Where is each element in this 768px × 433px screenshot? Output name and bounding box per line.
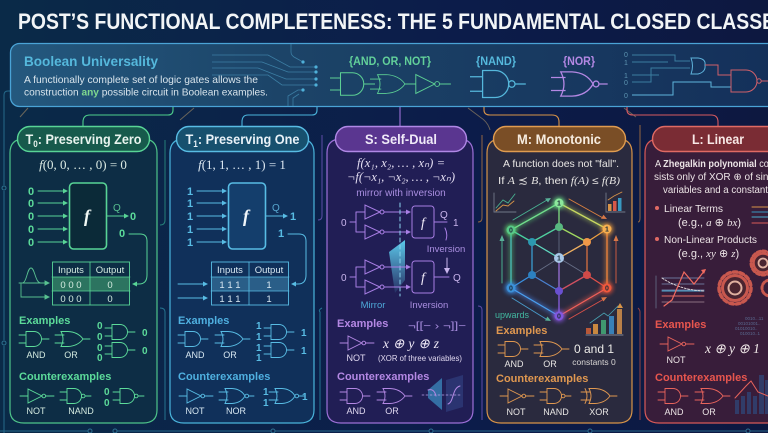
examples S: ¬[[− › ¬]]− [408, 321, 466, 332]
counterexamples M [496, 373, 617, 417]
formula S: f(x₁, x₂, … , xₙ) = [357, 156, 445, 170]
truth table T0: Output [96, 265, 125, 276]
bottom inverter circuit: Q [453, 273, 461, 284]
composite circuit [624, 52, 768, 100]
examples L: x ⊕ y ⊕ 1 [704, 341, 760, 356]
description M: If A ≾ B, then f(A) ≤ f(B) [498, 175, 621, 187]
examples T0: 0 [142, 328, 148, 339]
function block diagram T0: 0 [28, 211, 34, 223]
bullet list L: (e.g., a ⊕ bx) [678, 217, 741, 229]
header: T0: 0 [33, 139, 38, 149]
formula T0: f(0, 0, … , 0) = 0 [39, 157, 127, 172]
chart: monotonic lattice: 1 [557, 200, 561, 208]
counterexamples S: OR [385, 406, 399, 416]
truth table T1: 1 [266, 280, 272, 291]
chart: monotonic lattice [500, 197, 618, 322]
header: M: M: Monotonic [517, 131, 601, 147]
composite circuit: 1 [624, 60, 628, 67]
function block diagram T0: 0 [28, 237, 34, 249]
examples T1: 1 [256, 343, 262, 354]
data text: 01010010.. [735, 326, 758, 331]
examples T1: AND [185, 350, 205, 360]
examples T0: 0 [97, 321, 103, 332]
bullet list L: Linear Terms [664, 203, 723, 215]
top inverter circuit: f [421, 216, 427, 231]
icon: spectrum [735, 375, 768, 414]
examples M: Examples [496, 325, 547, 337]
counterexamples M: NAND [543, 407, 569, 417]
examples T1 [178, 315, 307, 364]
examples T1: Examples [178, 315, 229, 327]
counterexamples L: OR [702, 407, 716, 417]
function block diagram T1: 1 [278, 228, 284, 240]
bullet list L [655, 203, 757, 260]
function block diagram T0: 0 [28, 186, 34, 198]
truth table T0: 0 [107, 294, 113, 305]
truth table T1 [211, 262, 289, 305]
description M [498, 158, 621, 187]
data text: 010010..1 [740, 331, 761, 336]
examples T0: 0 [97, 332, 103, 343]
counterexamples T1: NOR [226, 406, 246, 416]
counterexamples T0: Counterexamples [19, 371, 111, 383]
panel: Boolean Universality [10, 44, 768, 106]
labels: mirror and inversion [361, 300, 448, 311]
icon: trend chart left [494, 193, 516, 212]
chart: monotonic lattice: 0 [557, 314, 561, 320]
caption: mirror with inversion: mirror with inversion [356, 188, 446, 199]
bullet list L: (e.g., xy ⊕ z) [678, 248, 739, 260]
counterexamples T1 [178, 371, 308, 416]
panel: L linear [645, 126, 768, 423]
heading: Boolean Universality: Boolean Universality [24, 53, 158, 69]
icon: mirror plane [389, 203, 405, 296]
labels: mirror and inversion: Inversion [410, 300, 448, 311]
chart: monotonic lattice: 1 [605, 226, 609, 234]
description L [654, 159, 768, 196]
examples T1: 1 [256, 321, 262, 332]
counterexamples T1: Counterexamples [178, 371, 270, 383]
header: L [652, 126, 768, 152]
top inverter circuit [341, 205, 459, 240]
composite circuit: 0 [624, 80, 628, 87]
composite circuit: 0 [624, 93, 628, 100]
icon: line chart [656, 269, 706, 308]
panel: M monotonic [487, 126, 632, 423]
description text: A functionally complete set of logic gates allows the [24, 74, 258, 86]
truth table T0: 0 [107, 280, 113, 291]
examples T1: 1 [301, 328, 307, 339]
header: T0: : Preserving Zero [38, 131, 142, 147]
description text: construction any possible circuit in Boolean examples. [24, 86, 274, 98]
labels: mirror and inversion: Mirror [361, 300, 385, 311]
counterexamples S: Counterexamples [337, 371, 429, 383]
icon: mirror curves [422, 375, 463, 412]
counterexamples L: Counterexamples [655, 372, 747, 384]
header: T1: : Preserving One [198, 131, 300, 147]
counterexamples S [337, 371, 429, 416]
counterexamples S: AND [346, 406, 366, 416]
truth table T1: 1 1 1 [219, 280, 241, 291]
function block diagram T1: Q [272, 203, 280, 214]
function block diagram T1: 1 [187, 186, 193, 198]
gate: NAND [470, 70, 526, 98]
examples T1: OR [223, 350, 237, 360]
counterexamples T1: NOT [186, 406, 205, 416]
top inverter circuit: Q [440, 210, 448, 221]
chart: monotonic lattice: 0 [509, 286, 513, 292]
examples T0: Examples [19, 315, 70, 327]
header: L: L: Linear [692, 131, 744, 147]
header: S [336, 126, 466, 152]
header: T1 [176, 126, 308, 152]
examples L [655, 319, 760, 365]
bottom inverter circuit: 0 [341, 273, 347, 284]
icon: bell curve [19, 268, 49, 299]
examples T0: AND [26, 350, 46, 360]
icon: small line stack [752, 207, 768, 223]
truth table T1: 1 1 1 [219, 294, 241, 305]
examples T0: 0 [142, 346, 148, 357]
truth table T0 [52, 262, 130, 305]
icon: rising bars [586, 303, 623, 335]
truth table T0: Inputs [58, 265, 84, 276]
truth table T0: 0 0 0 [60, 294, 82, 305]
function block diagram T0: 0 [28, 224, 34, 236]
header: T0: T [26, 131, 34, 147]
data text: 0010...11 [745, 316, 764, 321]
function block diagram T0: 0 [119, 228, 125, 240]
label: NAND set: {NAND} [476, 54, 516, 68]
bottom inverter circuit: f [421, 271, 427, 286]
examples M: AND [504, 359, 524, 369]
examples S [337, 318, 466, 363]
formula S: ¬f(¬x₁, ¬x₂, … , ¬xₙ) [347, 170, 455, 184]
header: M [494, 126, 626, 152]
data text [735, 316, 764, 336]
counterexamples T1: 1 [263, 398, 269, 409]
counterexamples M: NOT [506, 407, 526, 417]
icon: gears [719, 251, 768, 304]
panel: T1 preserving one [170, 126, 314, 423]
counterexamples T1: 1 [302, 392, 308, 403]
function block diagram T1 [187, 183, 306, 286]
counterexamples L [655, 372, 747, 417]
counterexamples T0: NOT [26, 406, 46, 416]
panel: S self-dual [327, 126, 473, 423]
formula T1: f(1, 1, … , 1) = 1 [198, 157, 286, 172]
examples T1: 1 [301, 346, 307, 357]
function block diagram T1: 1 [187, 211, 193, 223]
label: upwards: upwards [495, 310, 530, 320]
examples S: NOT [346, 353, 366, 363]
inversion label and arrow: Inversion [427, 244, 465, 255]
examples T0: 0 [97, 353, 103, 364]
header: S: S: Self-Dual [365, 131, 437, 147]
function block diagram T0: 0 [28, 198, 34, 210]
background circuit traces [0, 91, 768, 433]
examples M: OR [543, 359, 557, 369]
bottom inverter circuit [341, 260, 461, 294]
counterexamples T0: 0 [104, 387, 110, 398]
gate: NOR [551, 72, 608, 96]
examples M: constants 0 [572, 357, 616, 367]
counterexamples M: XOR [589, 407, 609, 417]
examples S: Examples [337, 318, 388, 330]
function block diagram T1: 1 [187, 198, 193, 210]
examples S: x ⊕ y ⊕ z [382, 336, 440, 351]
connectors from top panel to cards [83, 107, 718, 127]
header: T1: T [186, 131, 194, 147]
chart: monotonic lattice: 0 [605, 286, 609, 292]
chart: monotonic lattice: 0 [509, 228, 513, 234]
truth table T1: 1 [266, 294, 272, 305]
truth table T0: 0 0 0 [60, 280, 82, 291]
icon: bar chart right [606, 192, 625, 212]
examples L: NOT [666, 355, 686, 365]
function block diagram T0 [28, 183, 147, 286]
function block diagram T1: 1 [187, 224, 193, 236]
counterexamples L: AND [664, 407, 684, 417]
examples T0: OR [64, 350, 78, 360]
truth table T1: Output [255, 265, 284, 276]
panel: T0 preserving zero [10, 126, 157, 423]
examples S: (XOR of three variables) [378, 353, 462, 363]
counterexamples T0 [19, 371, 144, 416]
composite circuit: 0 [624, 52, 628, 59]
function block diagram T1: f [243, 206, 251, 226]
counterexamples T1: 1 [263, 387, 269, 398]
chart: monotonic lattice: 1 [557, 256, 561, 262]
function block diagram T0: f [84, 206, 92, 226]
top inverter circuit: 0 [341, 218, 347, 229]
icon: input arrows [178, 282, 208, 300]
label: NOR set: {NOR} [563, 54, 595, 68]
examples M [496, 325, 616, 369]
function block diagram T0: Q [113, 203, 121, 214]
examples M: 0 and 1 [574, 342, 614, 356]
examples T1: 1 [256, 332, 262, 343]
bullet list L: Non-Linear Products [664, 234, 757, 246]
examples T0: 0 [97, 343, 103, 354]
composite circuit: 1 [624, 73, 628, 80]
truth table T1: Inputs [217, 265, 243, 276]
inversion label and arrow [427, 244, 465, 274]
gates: AND OR NOT [330, 73, 451, 95]
header: T0 [18, 126, 150, 152]
function block diagram T1: 1 [290, 211, 296, 223]
top inverter circuit: 1 [453, 218, 459, 229]
counterexamples M: Counterexamples [496, 373, 588, 385]
counterexamples T0: NAND [68, 406, 94, 416]
circuit traces decoration [212, 44, 318, 106]
label: AND OR NOT set: {AND, OR, NOT} [349, 54, 431, 68]
examples T0 [19, 315, 148, 364]
description M: A function does not "fall". [503, 158, 619, 170]
counterexamples T0: 0 [104, 398, 110, 409]
header: T1: 1 [193, 139, 198, 149]
function block diagram T1: 1 [187, 237, 193, 249]
examples L: Examples [655, 319, 706, 331]
examples T1: 1 [256, 353, 262, 364]
function block diagram T0: 0 [130, 211, 136, 223]
data text: 00101001.. [738, 321, 761, 326]
